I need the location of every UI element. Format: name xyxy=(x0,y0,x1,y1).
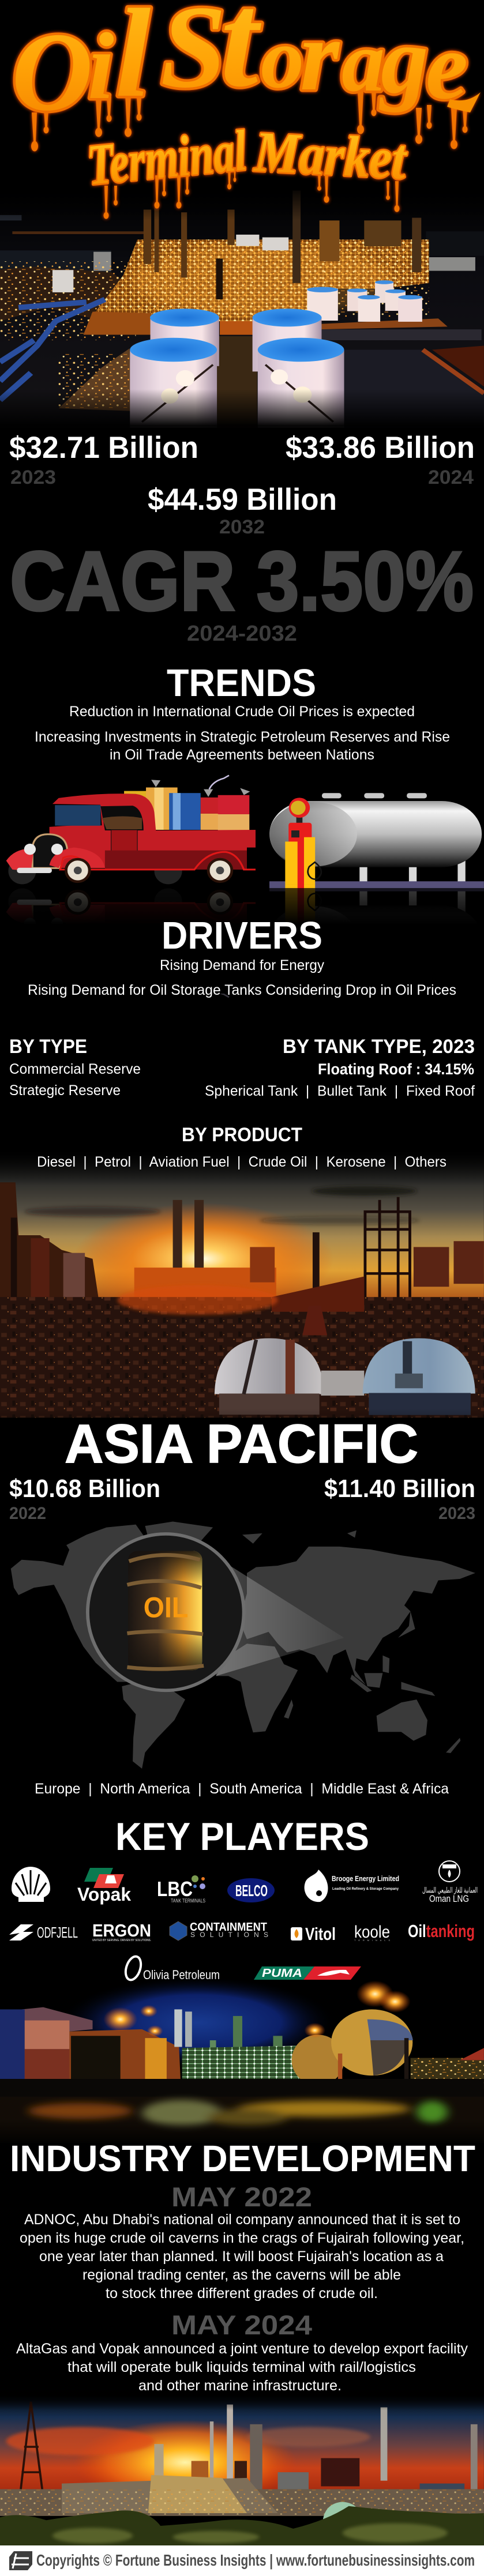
logo: Brooge Energy: Leading Oil Refinery & Storage Company xyxy=(332,1887,399,1891)
icon: delivery truck xyxy=(6,776,256,884)
development: May 2024 xyxy=(16,2310,468,2394)
magnifier circle xyxy=(87,1533,245,1691)
trend text: Reduction in International Crude Oil Prices is expected xyxy=(69,704,415,720)
development: May 2024: MAY 2024 xyxy=(171,2310,312,2340)
stat: Asia Pacific 2023: 2023 xyxy=(438,1504,475,1523)
footer bar xyxy=(0,2545,484,2576)
logo: Belco: BELCO xyxy=(235,1882,268,1900)
development: May 2024: AltaGas and Vopak announced a joint venture to develop export facility xyxy=(16,2341,468,2357)
back storage tanks xyxy=(150,309,321,371)
Oil Storage lettering: a xyxy=(342,14,385,110)
icon: oil barrel xyxy=(127,1551,204,1670)
front storage tanks xyxy=(130,338,344,427)
wet ground xyxy=(0,2079,484,2143)
logo: Koole: TERMINALS xyxy=(354,1939,390,1942)
segment: by tank type xyxy=(205,1036,475,1099)
dome tanks xyxy=(215,1338,475,1415)
development: May 2022: regional trading center, as the caverns will be able xyxy=(82,2267,401,2283)
development: May 2022: open its huge crude oil caverns in the crags of Fujairah following year, xyxy=(20,2230,464,2246)
Oil Storage lettering: o xyxy=(261,10,304,106)
stat: 2024 market size: $33.86 Billion xyxy=(286,431,475,465)
left silhouettes xyxy=(0,1182,99,1341)
segment: by type: Strategic Reserve xyxy=(9,1082,121,1099)
logo: Vitol: Vitol xyxy=(305,1924,336,1944)
logo: LBC: TANK TERMINALS xyxy=(171,1898,205,1904)
stat: Asia Pacific 2023 xyxy=(324,1475,475,1523)
refinery lights mass xyxy=(92,239,429,321)
segment: by type: BY TYPE xyxy=(9,1036,87,1058)
hero photo: refinery at night xyxy=(0,185,484,427)
logo: Olivia Petroleum: Olivia Petroleum xyxy=(143,1968,220,1982)
logo: LBC: LBC xyxy=(157,1877,193,1901)
tree line xyxy=(0,2506,484,2545)
logo: Brooge Energy xyxy=(305,1870,399,1902)
logo: Puma xyxy=(254,1966,361,1980)
segment: by type xyxy=(9,1036,141,1099)
logo: Oman LNG xyxy=(422,1861,478,1904)
stat: 2032 market size: $44.59 Billion xyxy=(148,483,337,517)
logo: Brooge Energy: Brooge Energy Limited xyxy=(332,1874,399,1883)
clouds xyxy=(25,1186,420,1225)
logo: Vopak xyxy=(77,1868,131,1905)
stat: Asia Pacific 2022 xyxy=(9,1475,160,1523)
drivers text: Rising Demand for Energy xyxy=(160,957,324,973)
key player logos xyxy=(9,1861,478,1982)
segment: by product xyxy=(37,1124,447,1170)
photo: refinery at sunset xyxy=(0,1147,484,1488)
segment: by product: BY PRODUCT xyxy=(182,1124,302,1146)
segment: by product: Diesel | Petrol | Aviation Fuel | Crude Oil | Kerosene | Others xyxy=(37,1154,447,1170)
logo: Vopak: Vopak xyxy=(77,1884,131,1905)
Oil Storage lettering: i xyxy=(88,13,114,119)
CAGR figure: 2024-2032 xyxy=(187,622,297,646)
Oil Storage lettering: e xyxy=(426,13,468,119)
development: May 2022: to stock three different grades of crude oil. xyxy=(106,2285,378,2302)
icon: Fortune Business Insights logo xyxy=(9,2551,32,2570)
stat: 2023 market size: $32.71 Billion xyxy=(9,431,198,465)
logo: Shell xyxy=(12,1867,50,1902)
development: May 2022: MAY 2022 xyxy=(171,2182,312,2212)
stat: Asia Pacific 2022: $10.68 Billion xyxy=(9,1475,160,1503)
stat: 2023 market size xyxy=(9,431,198,488)
trend text: in Oil Trade Agreements between Nations xyxy=(110,747,374,763)
heading: Asia Pacific: ASIA PACIFIC xyxy=(65,1413,418,1475)
central plant xyxy=(103,2005,299,2080)
illustration reflection xyxy=(6,885,484,997)
Oil Storage lettering: r xyxy=(300,0,340,111)
heading: key players: KEY PLAYERS xyxy=(115,1815,369,1859)
Terminal lettering: Terminal xyxy=(84,118,249,197)
photo: terminal at night xyxy=(0,1976,484,2146)
heading: trends: TRENDS xyxy=(167,661,316,705)
logo: Oman LNG: Oman LNG xyxy=(429,1893,469,1904)
oil drips xyxy=(31,91,468,219)
stat: 2032 market size: 2032 xyxy=(219,516,265,538)
segment: by type: Commercial Reserve xyxy=(9,1061,141,1077)
logo: Ergon: ERGON xyxy=(92,1920,151,1941)
Oil Storage lettering: O xyxy=(12,10,93,134)
orange ground and blue pipes xyxy=(0,299,484,427)
stat: Asia Pacific 2022: 2022 xyxy=(9,1504,46,1523)
logo: Containment Solutions: CONTAINMENT xyxy=(190,1921,267,1934)
icon: fuel pump xyxy=(285,798,321,888)
segment: by tank type: BY TANK TYPE, 2023 xyxy=(283,1036,475,1058)
development: May 2022: one year later than planned. It will boost Fujairah's location as a xyxy=(39,2248,444,2265)
logo: Odfjell: ODFJELL xyxy=(37,1924,78,1941)
world map with magnifier xyxy=(11,1521,475,1769)
development: May 2022: ADNOC, Abu Dhabi's national oil company announced that it is set to xyxy=(24,2212,460,2228)
logo: Odfjell xyxy=(9,1924,78,1941)
left plant xyxy=(0,261,136,340)
section: drivers xyxy=(28,914,456,998)
logo: Containment Solutions: SOLUTIONS xyxy=(190,1931,268,1939)
logo: Containment Solutions xyxy=(170,1921,268,1941)
skyline and towers xyxy=(0,2402,484,2523)
segment: by tank type: Spherical Tank | Bullet Tank | Fixed Roof xyxy=(205,1083,475,1099)
drivers text xyxy=(28,957,456,998)
development: May 2022 xyxy=(20,2182,464,2302)
stat: Asia Pacific 2023: $11.40 Billion xyxy=(324,1475,475,1503)
stat: 2023 market size: 2023 xyxy=(10,467,56,488)
Oil Storage lettering: g xyxy=(378,7,428,113)
segment: by tank type: Floating Roof : 34.15% xyxy=(318,1061,474,1078)
title: Oil Storage xyxy=(12,0,481,219)
heading: industry development: INDUSTRY DEVELOPMENT xyxy=(10,2138,475,2179)
logo: Olivia Petroleum xyxy=(123,1954,220,1982)
development: May 2024: and other marine infrastructure. xyxy=(138,2378,342,2394)
small white tanks xyxy=(52,235,475,292)
stat: 2024 market size: 2024 xyxy=(428,467,474,488)
icon: storage tank xyxy=(269,793,484,888)
stat: 2032 market size xyxy=(148,483,337,538)
central pipework xyxy=(217,336,257,427)
logo: Puma: PUMA xyxy=(262,1967,302,1980)
left tanks xyxy=(0,2007,181,2081)
development: May 2024: that will operate bulk liquids terminal with rail/logistics xyxy=(67,2359,416,2375)
Market lettering: Market xyxy=(252,119,409,191)
logo: Koole: koole xyxy=(354,1923,390,1942)
scaffold tower xyxy=(365,1197,410,1300)
right cluster of tanks xyxy=(307,280,422,322)
logo: Ergon: UNITED BY SERVING. DRIVEN BY SOLUTIONS. xyxy=(92,1939,151,1942)
photo: refinery skyline at sunset xyxy=(0,2393,484,2545)
section: trends xyxy=(35,661,450,763)
trend text: Increasing Investments in Strategic Petroleum Reserves and Rise xyxy=(35,729,450,745)
world map xyxy=(11,1521,475,1769)
stat: 2024 market size xyxy=(286,431,475,488)
regions list: Europe | North America | South America | Middle East & Africa xyxy=(35,1781,449,1797)
horizon lights xyxy=(0,215,484,275)
drivers text: Rising Demand for Oil Storage Tanks Considering Drop in Oil Prices xyxy=(28,982,456,998)
process towers xyxy=(144,190,421,299)
icon: oil barrel: OIL xyxy=(144,1591,188,1623)
highlight cone to Asia Pacific xyxy=(216,1566,344,1676)
foreground plant xyxy=(0,1297,484,1417)
illustration: oil truck and storage tank xyxy=(0,776,484,997)
logo: Vitol xyxy=(291,1924,336,1944)
central stacks xyxy=(173,1200,204,1270)
heading: drivers: DRIVERS xyxy=(162,914,322,957)
trend text xyxy=(35,704,450,763)
oil tail xyxy=(447,92,481,112)
spherical tanks xyxy=(292,1981,484,2091)
logo: Belco xyxy=(227,1878,275,1902)
